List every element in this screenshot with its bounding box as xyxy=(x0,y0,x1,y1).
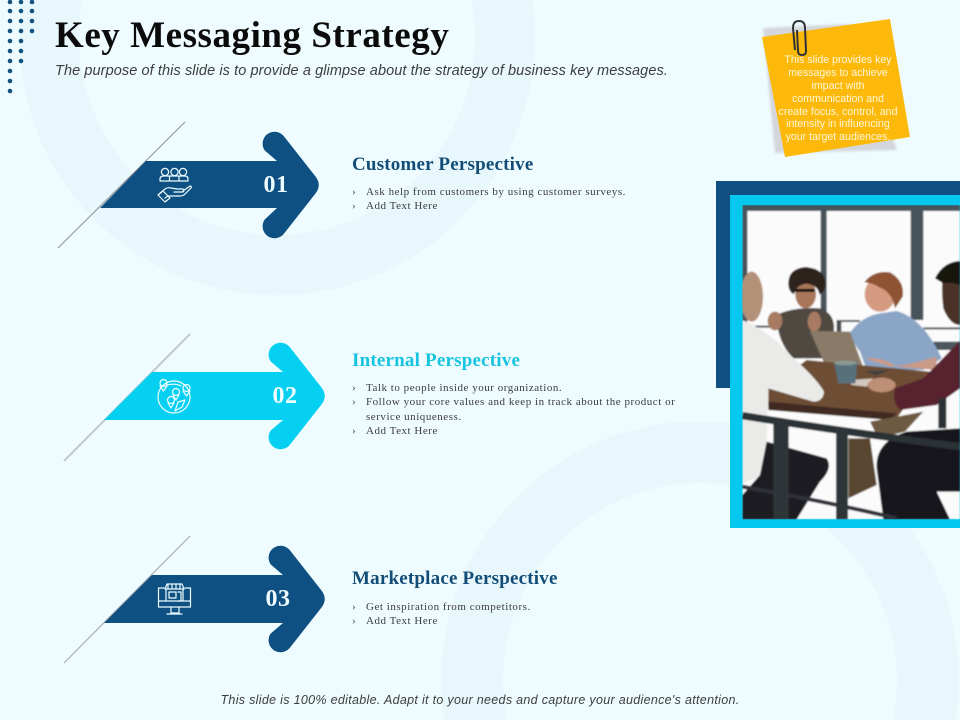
text block: customer perspective: Add Text Here xyxy=(366,200,438,212)
number 01: 01 xyxy=(264,172,288,198)
number 02: 02 xyxy=(272,383,298,409)
text block: marketplace perspective: › xyxy=(352,601,356,613)
text block: marketplace perspective: Add Text Here xyxy=(366,615,438,627)
text block: marketplace perspective xyxy=(352,568,558,627)
sticky note callout: intensity in influencing xyxy=(786,118,890,130)
icon: globe with pins xyxy=(158,380,190,413)
icon: online store monitor xyxy=(158,584,190,614)
icon: people in hand xyxy=(158,168,191,202)
text block: internal perspective: › xyxy=(352,396,356,408)
sticky note callout: messages to achieve xyxy=(788,67,888,79)
text block: internal perspective: Internal Perspective xyxy=(352,350,520,371)
sticky note callout: your target audiences. xyxy=(786,131,890,143)
text block: internal perspective xyxy=(352,350,675,437)
footer note: This slide is 100% editable. Adapt it to your needs and capture your audience's attention. xyxy=(220,693,740,707)
photo panel: team meeting xyxy=(716,181,960,528)
number 03: 03 xyxy=(266,586,290,612)
text block: customer perspective: Ask help from customers by using customer surveys. xyxy=(366,186,626,198)
decorative dot grid xyxy=(8,0,34,93)
text block: customer perspective: › xyxy=(352,200,356,212)
title: Key Messaging Strategy xyxy=(55,15,449,56)
text block: customer perspective: Customer Perspective xyxy=(352,154,533,175)
arrow 02 xyxy=(64,334,325,461)
subtitle: The purpose of this slide is to provide a glimpse about the strategy of business key messages. xyxy=(55,63,668,79)
sticky note callout: communication and xyxy=(792,93,884,105)
text block: internal perspective: Follow your core values and keep in track about the product or xyxy=(366,396,675,408)
arrow 03 xyxy=(64,536,325,663)
text block: internal perspective: › xyxy=(352,425,356,437)
text block: internal perspective: Talk to people inside your organization. xyxy=(366,382,562,394)
sticky note callout xyxy=(762,19,910,157)
text block: customer perspective: › xyxy=(352,186,356,198)
text block: internal perspective: › xyxy=(352,382,356,394)
text block: marketplace perspective: Marketplace Perspective xyxy=(352,568,558,589)
text block: internal perspective: service uniqueness. xyxy=(366,411,462,423)
sticky note callout: This slide provides key xyxy=(784,54,892,66)
text block: marketplace perspective: Get inspiration from competitors. xyxy=(366,601,531,613)
text block: customer perspective xyxy=(352,154,626,212)
sticky note callout: create focus, control, and xyxy=(779,106,898,118)
text block: internal perspective: Add Text Here xyxy=(366,425,438,437)
text block: marketplace perspective: › xyxy=(352,615,356,627)
sticky note callout: impact with xyxy=(812,80,865,92)
arrow 01 xyxy=(58,122,319,248)
